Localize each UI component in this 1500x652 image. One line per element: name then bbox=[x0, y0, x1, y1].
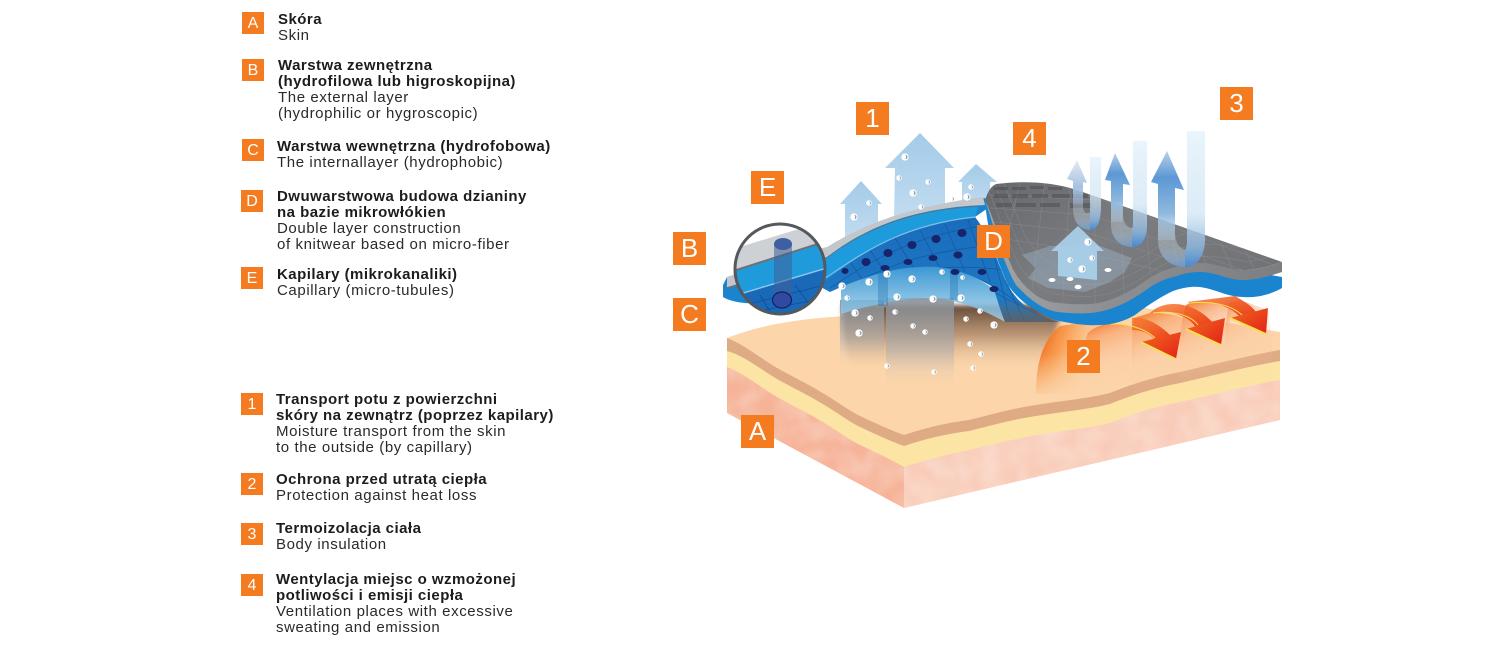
lens bright blue layer bbox=[736, 245, 824, 292]
legend item D text: Double layer construction bbox=[277, 220, 461, 237]
fabric: arch and under surface bbox=[723, 197, 1065, 324]
pale edge line bbox=[765, 217, 975, 300]
callout tag 3: 3 bbox=[1229, 88, 1244, 118]
translucent arch below under surface bbox=[841, 265, 1005, 322]
legend item 4 text: sweating and emission bbox=[276, 619, 440, 636]
legend item A icon bbox=[242, 12, 264, 34]
callout tag 3 bbox=[1220, 87, 1253, 120]
moisture column left bbox=[840, 300, 884, 365]
legend item 3 icon bbox=[241, 523, 263, 545]
callout tag 2: 2 bbox=[1076, 341, 1091, 371]
pale vent cells bbox=[1022, 246, 1132, 292]
right arrow bbox=[958, 164, 997, 210]
legend item E text: Capillary (micro-tubules) bbox=[277, 282, 455, 299]
legend item A text: Skin bbox=[278, 27, 310, 44]
legend item 4 text bbox=[276, 571, 516, 636]
darkened vent cells bbox=[994, 186, 1092, 208]
callout tag D: D bbox=[984, 226, 1003, 256]
lens ring bbox=[735, 224, 825, 314]
legend item C text bbox=[277, 138, 551, 171]
legend item 1 icon: 1 bbox=[248, 396, 256, 413]
ventilation arrow (4) with pale cells bbox=[1022, 226, 1132, 292]
legend item 1 text: skóry na zewnątrz (poprzez kapilary) bbox=[276, 407, 554, 424]
skin: top surface bbox=[727, 300, 1280, 435]
U-turn C left bbox=[1158, 190, 1185, 267]
legend item C icon bbox=[242, 139, 264, 161]
heat fans on skin bbox=[1036, 300, 1272, 395]
moisture arrows above fabric (1) bbox=[840, 133, 997, 240]
heat fan 5 bbox=[1226, 300, 1270, 344]
vent arrow bbox=[1051, 226, 1104, 280]
legend item E text bbox=[277, 266, 458, 299]
legend item 4 icon bbox=[241, 574, 263, 596]
moisture bubbles bbox=[838, 153, 1112, 375]
lens grey surface bbox=[736, 230, 816, 269]
legend item B text bbox=[278, 57, 516, 122]
legend item 1 text: Moisture transport from the skin bbox=[276, 423, 506, 440]
legend item D text: na bazie mikrowłókien bbox=[277, 204, 446, 221]
legend item 1 text: Transport potu z powierzchni bbox=[276, 391, 498, 408]
grey surface grid bbox=[989, 182, 1273, 304]
skin: deep layer left side bbox=[727, 360, 904, 508]
callout tag C bbox=[673, 298, 706, 331]
grid on under surface bbox=[830, 220, 1050, 322]
arrow C bbox=[1151, 151, 1184, 240]
legend item E icon bbox=[241, 267, 263, 289]
U-turn B left bbox=[1111, 185, 1132, 247]
U-turn C right strip bbox=[1185, 131, 1205, 267]
illustration: fabric over skin cross-section bbox=[723, 131, 1282, 508]
legend item C icon: C bbox=[247, 142, 259, 159]
arrow A bbox=[1067, 160, 1087, 205]
legend item B text: Warstwa zewnętrzna bbox=[278, 57, 433, 74]
callout tag B bbox=[673, 232, 706, 265]
legend: layers bbox=[241, 11, 551, 299]
arrow B bbox=[1105, 153, 1130, 222]
legend item 2 icon: 2 bbox=[248, 476, 256, 493]
grey outer strip bbox=[727, 197, 985, 288]
skin: deep layer right side bbox=[904, 370, 1280, 508]
tube top bbox=[774, 238, 792, 250]
lens dark line bbox=[736, 244, 816, 271]
blue lower layer bbox=[985, 200, 1282, 325]
heat arrow 2 bbox=[1150, 304, 1225, 345]
callout tag E bbox=[751, 171, 784, 204]
legend item 3 text bbox=[276, 520, 422, 553]
capillary tube bbox=[774, 244, 792, 298]
moisture column centre bbox=[886, 298, 954, 386]
grey thick band bbox=[985, 200, 1282, 313]
legend item D text: of knitwear based on micro-fiber bbox=[277, 236, 510, 253]
lens under surface bbox=[744, 270, 824, 312]
heat arrow 1 bbox=[1110, 318, 1181, 359]
under surface fade to shadow bbox=[998, 300, 1060, 322]
thermal insulation U arrows (3) bbox=[1067, 131, 1205, 267]
legend item A text bbox=[278, 11, 322, 44]
heat arrow 3 bbox=[1187, 296, 1268, 334]
legend item C text: The internallayer (hydrophobic) bbox=[277, 154, 503, 171]
tube bottom bbox=[772, 292, 792, 308]
legend item B text: (hydrofilowa lub higroskopijna) bbox=[278, 73, 516, 90]
legend item A text: Skóra bbox=[278, 11, 322, 28]
U-turn A right strip bbox=[1090, 157, 1101, 230]
callout tag 4: 4 bbox=[1022, 123, 1037, 153]
legend item B icon bbox=[242, 59, 264, 81]
grey top surface bbox=[985, 182, 1282, 304]
legend item 2 text: Protection against heat loss bbox=[276, 487, 477, 504]
legend item E icon: E bbox=[247, 270, 257, 287]
legend item 1 text bbox=[276, 391, 554, 456]
callout tag E: E bbox=[759, 172, 776, 202]
U-turn B right strip bbox=[1132, 141, 1147, 247]
legend item 1 icon bbox=[241, 393, 263, 415]
heat fan 2 bbox=[1086, 324, 1133, 360]
legend item 3 text: Body insulation bbox=[276, 536, 387, 553]
legend item E text: Kapilary (mikrokanaliki) bbox=[277, 266, 458, 283]
bright blue band bbox=[760, 207, 978, 300]
callout tag 1 bbox=[856, 102, 889, 135]
small left arrow bbox=[840, 181, 882, 240]
U-turn A left bbox=[1073, 180, 1090, 230]
callout tag 4 bbox=[1013, 122, 1046, 155]
callout tag A bbox=[741, 415, 774, 448]
heat fan 1 bbox=[1036, 324, 1101, 394]
heat fan 4 bbox=[1180, 302, 1238, 356]
lens pale line bbox=[743, 268, 824, 294]
legend item B text: (hydrophilic or hygroscopic) bbox=[278, 105, 478, 122]
left fabric tip bbox=[723, 198, 988, 303]
callout tag D bbox=[977, 225, 1010, 258]
callout tag 2 bbox=[1067, 340, 1100, 373]
fabric: right S-curve sheet bbox=[985, 182, 1282, 326]
heat fan 3 bbox=[1132, 313, 1183, 359]
dark strips between moisture columns bbox=[878, 268, 958, 306]
legend item B text: The external layer bbox=[278, 89, 409, 106]
legend item C text: Warstwa wewnętrzna (hydrofobowa) bbox=[277, 138, 551, 155]
skin block bbox=[727, 300, 1280, 510]
legend item 2 icon bbox=[241, 473, 263, 495]
legend item 4 text: Ventilation places with excessive bbox=[276, 603, 513, 620]
dark strip line bbox=[727, 207, 978, 288]
skin: yellow fat layer bbox=[727, 338, 1280, 467]
callout tag C: C bbox=[680, 299, 699, 329]
legend item 4 text: Wentylacja miejsc o wzmożonej bbox=[276, 571, 516, 588]
callout tag B: B bbox=[681, 233, 698, 263]
legend item D icon: D bbox=[246, 193, 258, 210]
red heat arrows bbox=[1110, 296, 1268, 359]
magnifier lens: capillary detail bbox=[730, 224, 830, 320]
moisture columns fading on skin bbox=[840, 298, 954, 386]
legend item B icon: B bbox=[248, 62, 258, 79]
legend: functions bbox=[241, 391, 554, 636]
legend item 3 text: Termoizolacja ciała bbox=[276, 520, 421, 537]
legend item D text bbox=[277, 188, 527, 253]
skin: brown epidermis band bbox=[727, 338, 1280, 446]
legend item 1 text: to the outside (by capillary) bbox=[276, 439, 473, 456]
legend item 4 text: potliwości i emisji ciepła bbox=[276, 587, 463, 604]
legend item D text: Dwuwarstwowa budowa dzianiny bbox=[277, 188, 527, 205]
shadow under fabric on skin bbox=[838, 301, 1062, 358]
legend item 3 icon: 3 bbox=[248, 526, 256, 543]
callout tag 1: 1 bbox=[865, 103, 880, 133]
legend item 4 icon: 4 bbox=[248, 577, 256, 594]
capillary holes bbox=[842, 229, 998, 292]
legend item A icon: A bbox=[248, 15, 258, 32]
legend item 2 text bbox=[276, 471, 487, 504]
large centre arrow bbox=[885, 133, 954, 220]
legend item D icon bbox=[241, 190, 263, 212]
dark blue under surface bbox=[815, 217, 1060, 322]
legend item 2 text: Ochrona przed utratą ciepła bbox=[276, 471, 487, 488]
callout tag A: A bbox=[749, 416, 766, 446]
